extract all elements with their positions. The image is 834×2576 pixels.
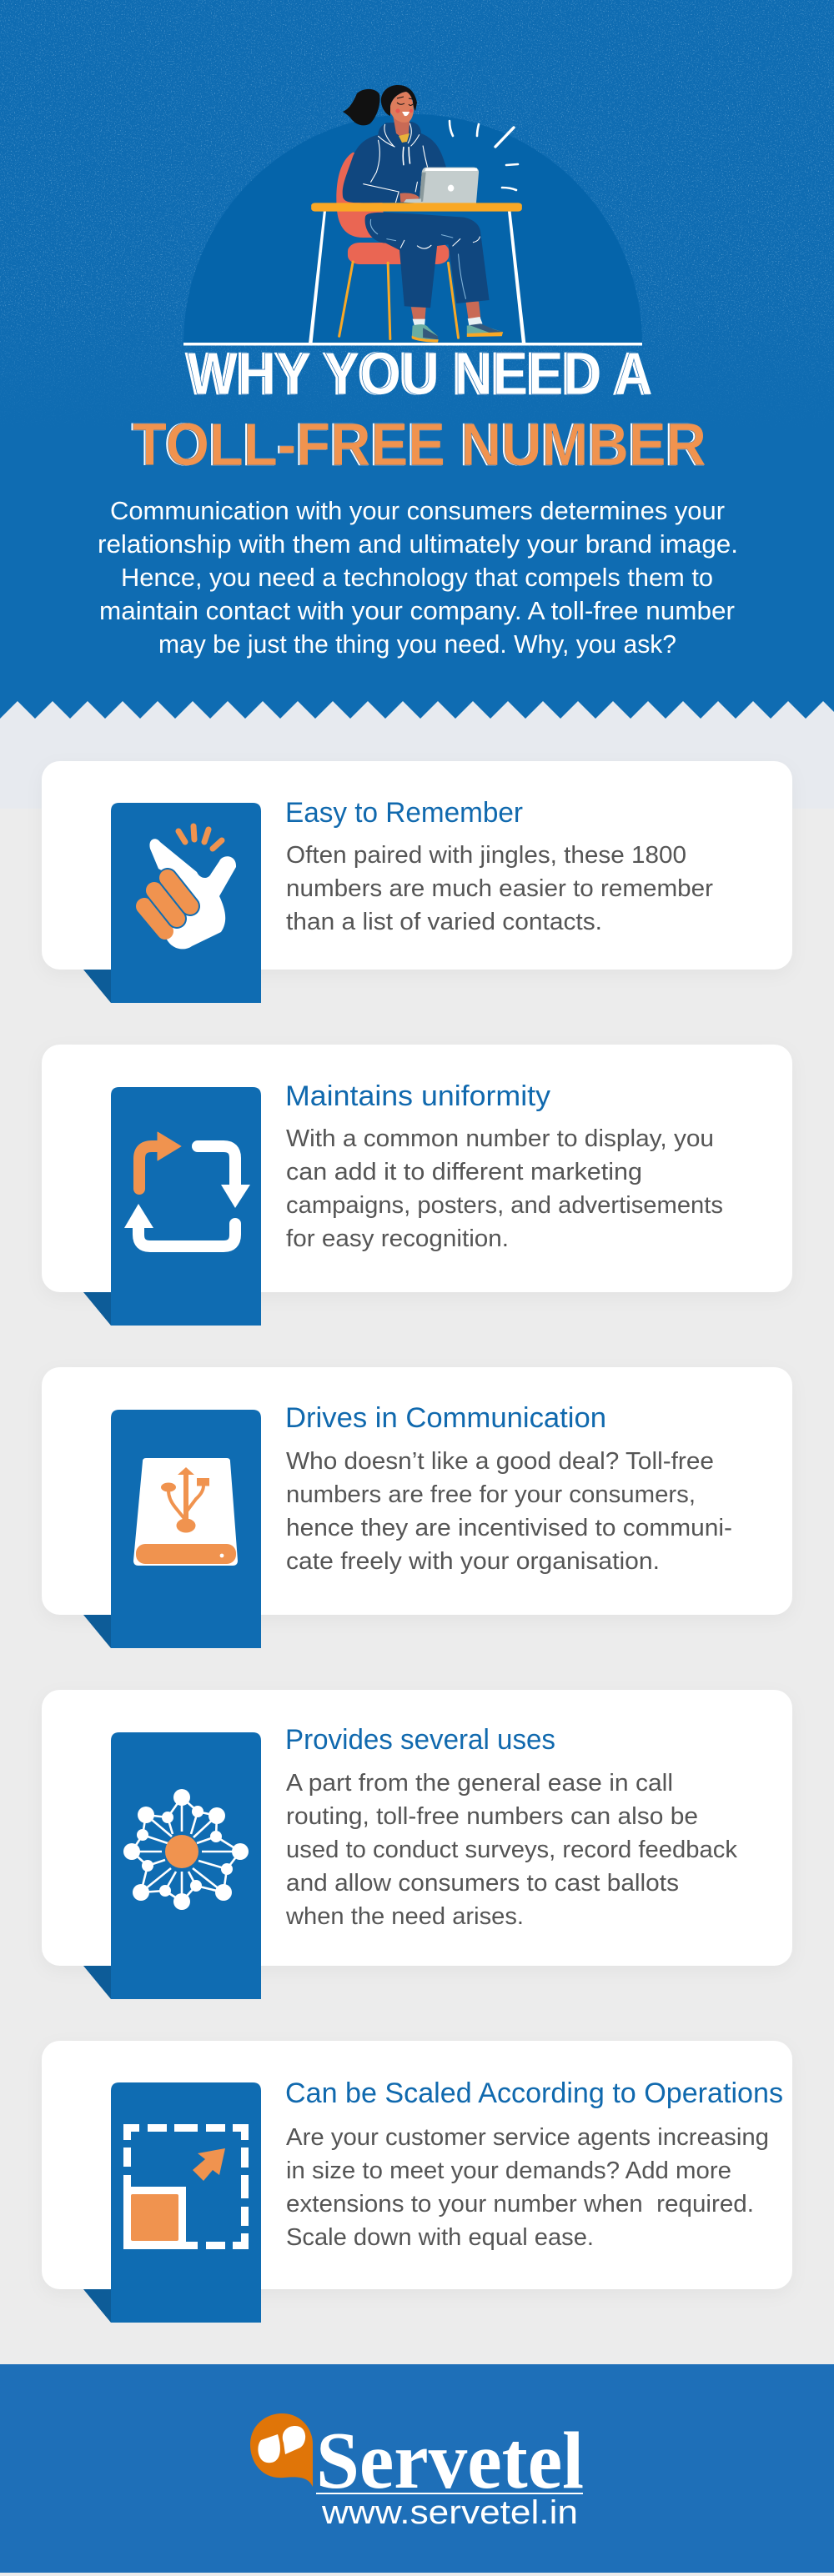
intro paragraph: Communication with your consumers determines your [110,497,725,525]
body text: than a list of varied contacts. [286,909,602,935]
panel: drives in communication [42,1367,792,1648]
body text: numbers are much easier to remember [286,875,714,902]
chair back [336,153,385,238]
body text [286,842,714,935]
footer band [0,2364,834,2573]
heading: Maintains uniformity [285,1080,550,1112]
body text: hence they are incentivised to communi- [286,1515,732,1541]
light band below the header [0,692,834,809]
ankles [411,302,480,321]
title line one: WHY YOU NEED A [188,341,653,408]
body text: and allow consumers to cast ballots [286,1870,679,1897]
ribbon fold [83,1615,111,1648]
body text: With a common number to display, you [286,1125,714,1152]
icon: network hub [123,1789,249,1910]
desk top [311,203,522,212]
ribbon [111,2082,261,2323]
intro paragraph [98,497,738,659]
body text: A part from the general ease in call [286,1770,673,1797]
neck [392,110,410,138]
card background [42,761,792,970]
body text: for easy recognition. [286,1225,509,1252]
ponytail [343,89,379,125]
heading: Drives in Communication [285,1402,606,1434]
logo underline [316,2493,583,2494]
trousers [365,213,490,308]
ribbon fold [83,2289,111,2323]
body text: numbers are free for your consumers, [286,1481,696,1508]
card background [42,2041,792,2289]
motion lines [450,121,518,190]
ribbon fold [83,1966,111,1999]
panel: header background with zigzag edge [0,0,834,719]
heading: Can be Scaled According to Operations [285,2077,783,2109]
body text: campaigns, posters, and advertisements [286,1192,723,1219]
heading: Easy to Remember [285,797,523,829]
logo wordmark: Servetel [316,2416,584,2506]
body text: Scale down with equal ease. [286,2224,594,2251]
ribbon [111,1732,261,1999]
body text: when the need arises. [285,1903,524,1930]
chair legs [339,262,459,339]
socks [413,317,483,329]
body text: routing, toll-free numbers can also be [286,1803,698,1830]
background semicircle [183,114,642,343]
body text: in size to meet your demands? Add more [286,2158,731,2184]
website url: www.servetel.in [321,2494,578,2531]
icon: usb drive [133,1458,238,1566]
hand [399,193,420,203]
panel: maintains uniformity [42,1045,792,1326]
body text: cate freely with your organisation. [286,1548,660,1575]
hoodie [343,122,446,203]
ribbon [111,803,261,1003]
face [390,92,414,123]
chair seat [348,243,449,264]
ribbon fold [83,970,111,1003]
body text: Are your customer service agents increasing [286,2124,769,2151]
panel: easy to remember [42,761,792,1003]
body text: Often paired with jingles, these 1800 [286,842,686,869]
body text: used to conduct surveys, record feedback [286,1837,738,1863]
ground line [183,343,642,345]
hair [381,85,417,116]
illustration: woman working at a laptop [183,85,642,345]
heading: Provides several uses [285,1724,555,1756]
face details [395,97,413,116]
hoodie lines [364,123,427,203]
title line two: TOLL-FREE NUMBER [133,412,706,479]
intro paragraph: maintain contact with your company. A toll-free number [99,597,735,625]
body text [286,1448,732,1575]
laptop [420,168,479,203]
body text [286,2124,769,2251]
ribbon [111,1410,261,1648]
ribbon fold [83,1292,111,1326]
panel: provides several uses [42,1690,792,1999]
intro paragraph: Hence, you need a technology that compels them to [121,564,713,592]
panel: footer [0,2364,834,2573]
ribbon [111,1087,261,1326]
intro paragraph: relationship with them and ultimately your brand image. [98,530,738,559]
woman head [343,85,417,143]
desk legs [309,211,525,343]
body text: extensions to your number when required. [286,2191,754,2218]
intro paragraph: may be just the thing you need. Why, you ask? [158,630,676,659]
trouser creases [370,219,480,298]
card background [42,1045,792,1292]
card background [42,1690,792,1966]
necklace [399,133,409,143]
card background [42,1367,792,1615]
title: why you need a toll-free number [133,341,706,479]
icon: speech bubble logo [250,2413,313,2487]
shoes [412,324,438,340]
icon: loop arrows [124,1132,250,1246]
body text: Who doesn’t like a good deal? Toll-free [286,1448,714,1475]
icon: scale up box [123,2124,249,2249]
woman body and chair [309,122,525,343]
body text [285,1770,738,1930]
body text [286,1125,723,1252]
panel: can be scaled according to operations [42,2041,792,2323]
icon: finger snap hand [144,826,236,949]
body text: can add it to different marketing [286,1159,642,1185]
laptop logo [448,185,454,192]
